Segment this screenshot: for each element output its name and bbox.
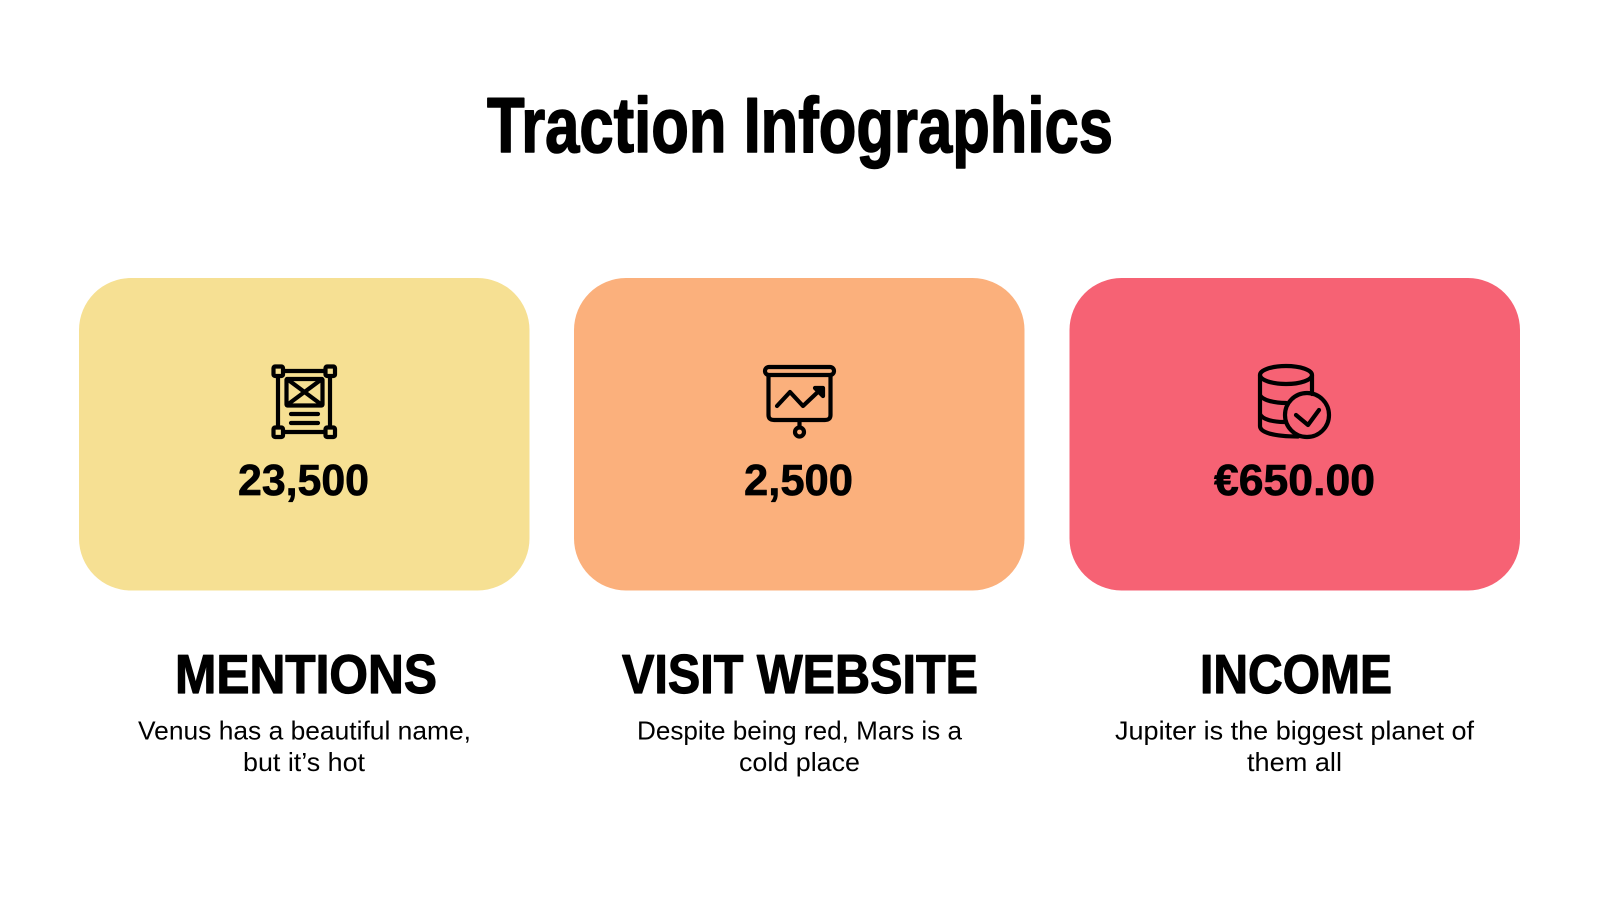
heading: income: INCOME	[1200, 643, 1392, 705]
text block: income description: Jupiter is the biggest planet of	[1115, 716, 1475, 746]
metric: 23,500: 23,500	[238, 456, 369, 505]
panel: income card	[1070, 278, 1520, 590]
text block: visit website description: cold place	[739, 747, 860, 777]
metric: €650.00: €650.00	[1214, 456, 1375, 505]
icon: database with check badge	[1260, 366, 1329, 437]
icon: wireframe document	[274, 366, 335, 437]
text block: mentions description: Venus has a beautiful name,	[138, 716, 471, 746]
text block: visit website description: Despite being red, Mars is a	[637, 716, 963, 746]
heading: mentions: MENTIONS	[175, 643, 437, 705]
title: Traction Infographics	[487, 81, 1113, 169]
text block: mentions description: but it’s hot	[243, 747, 366, 777]
metric: 2,500: 2,500	[744, 456, 853, 505]
heading: visit website: VISIT WEBSITE	[622, 643, 978, 705]
icon: presentation board with rising chart	[765, 367, 834, 436]
text block: income description	[1115, 716, 1475, 777]
panel: mentions card	[79, 278, 530, 590]
text block: mentions description	[138, 716, 471, 777]
text block: visit website description	[637, 716, 963, 777]
text block: income description: them all	[1247, 747, 1342, 777]
panel: visit website card	[574, 278, 1024, 590]
